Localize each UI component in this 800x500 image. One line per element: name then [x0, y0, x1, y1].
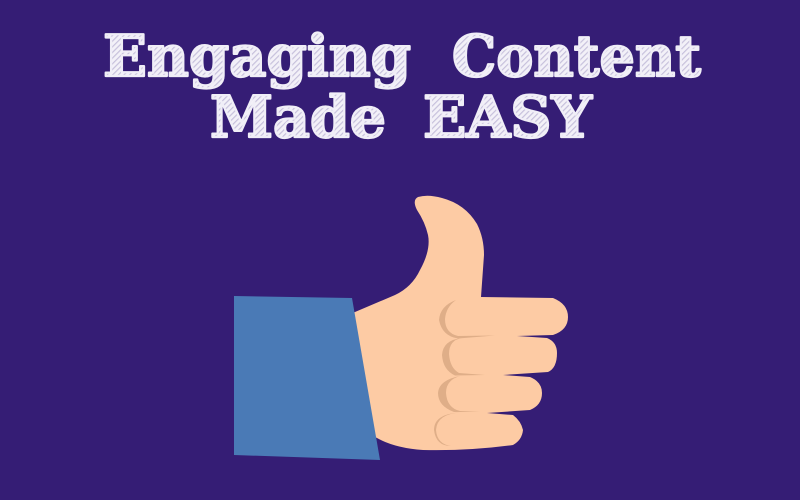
finger crease: middle — [442, 338, 485, 376]
title line 1: Engaging — [103, 23, 411, 90]
title — [103, 23, 702, 151]
finger crease: index — [439, 300, 495, 338]
hand and fingers — [340, 196, 568, 450]
sleeve — [234, 296, 380, 460]
title line 2: Made — [210, 84, 386, 151]
icon: thumbs up hand — [234, 196, 568, 460]
title line 2: EASY — [423, 84, 593, 151]
finger crease: ring — [438, 376, 480, 412]
finger crease: little — [434, 412, 460, 446]
title line 1: Content — [452, 23, 702, 90]
